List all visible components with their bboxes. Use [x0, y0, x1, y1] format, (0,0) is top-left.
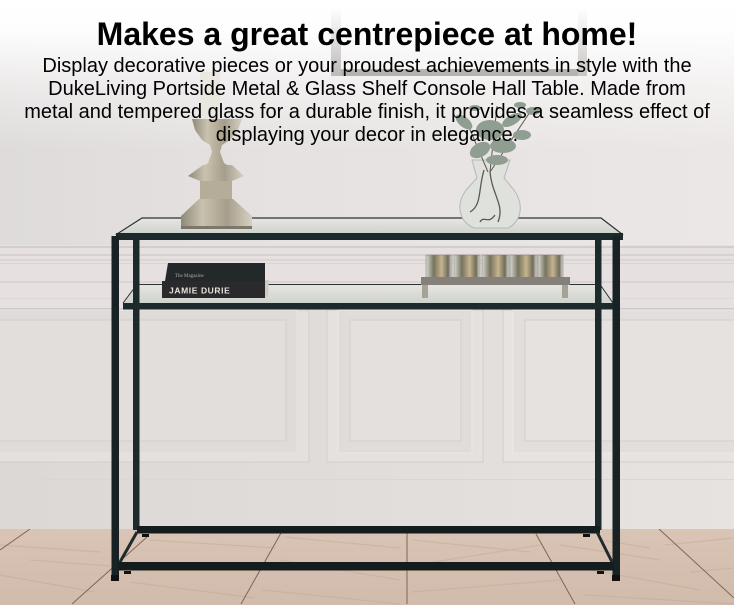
- stacked books: The Magazine: [175, 274, 205, 279]
- table back and glass: [117, 218, 622, 562]
- wall picture frame: [331, 8, 587, 76]
- bottom back rail: [137, 526, 600, 534]
- wall panel left: [0, 310, 309, 462]
- wall panel centre: [327, 310, 483, 462]
- table front frame: [111, 233, 623, 581]
- front legs: [112, 236, 119, 578]
- bottom front rail: [118, 562, 614, 570]
- book spine text: JAMIE DURIE: [169, 286, 230, 296]
- title: Makes a great centrepiece at home!: [97, 16, 637, 52]
- back legs: [133, 238, 140, 530]
- bottom side rails: [120, 532, 612, 562]
- description text: metal and tempered glass for a durable finish, it provides a seamless effect of: [24, 101, 710, 123]
- top front rail: [116, 233, 623, 240]
- candle holders on tray: [421, 255, 570, 298]
- description text: Display decorative pieces or your proudest achievements in style with the: [42, 55, 692, 77]
- crown moulding: [0, 245, 734, 310]
- stacked books: [162, 263, 269, 298]
- shelf front rail: [123, 303, 614, 310]
- wall panel right: [503, 310, 734, 462]
- top glass shelf: [117, 218, 622, 234]
- floor: [0, 529, 734, 605]
- glass vase with eucalyptus: [453, 102, 540, 228]
- description text: displaying your decor in elegance.: [216, 124, 518, 146]
- description text: [24, 55, 710, 146]
- white fade behind text: [0, 0, 734, 150]
- silver urn with candle: [181, 72, 252, 229]
- lower wall: [0, 310, 734, 529]
- description text: DukeLiving Portside Metal & Glass Shelf Console Hall Table. Made from: [48, 78, 686, 100]
- lower glass shelf: [123, 284, 613, 303]
- feet: [111, 534, 620, 581]
